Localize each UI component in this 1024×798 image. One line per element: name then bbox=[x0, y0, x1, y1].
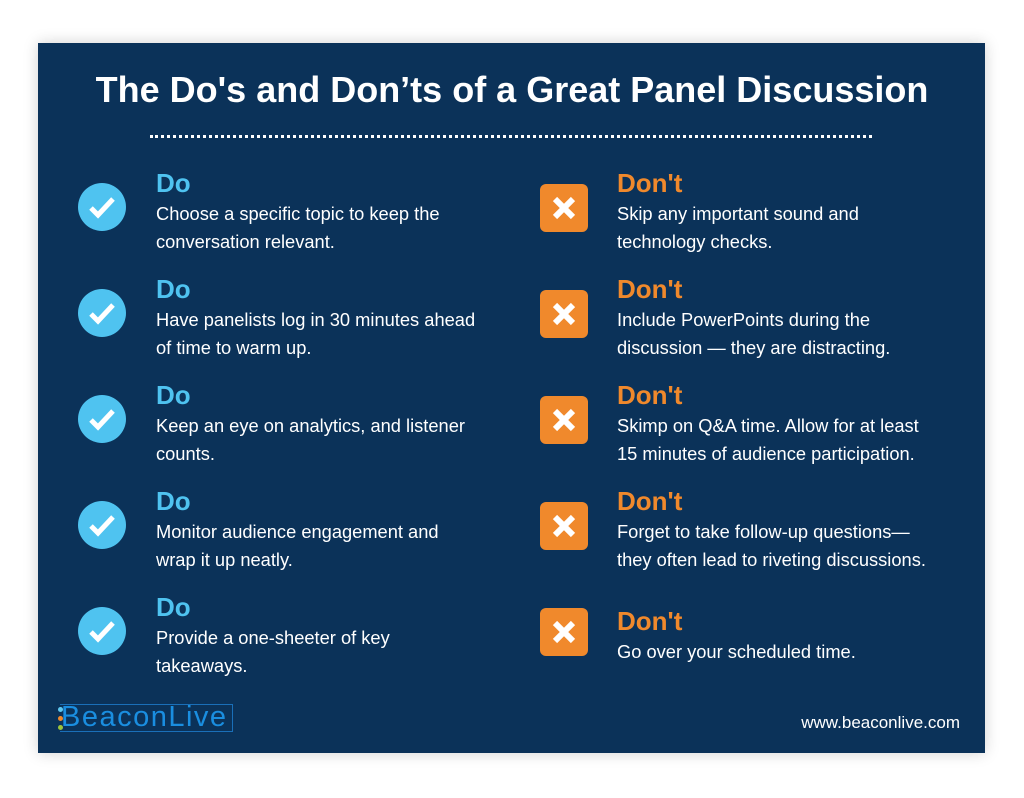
item: dont 2: Don't bbox=[617, 274, 682, 304]
item: do 2 bbox=[156, 274, 475, 358]
icon: x 4 bbox=[540, 502, 588, 550]
icon: check 4 bbox=[78, 501, 126, 549]
title: The Do's and Don’ts of a Great Panel Discussion bbox=[96, 69, 928, 110]
item: do 5: Do bbox=[156, 592, 191, 622]
item: do 4: wrap it up neatly. bbox=[156, 549, 293, 570]
item: do 4 bbox=[156, 486, 439, 570]
item: dont 1 bbox=[617, 168, 859, 252]
item: do 2: Have panelists log in 30 minutes ahead bbox=[156, 309, 475, 330]
item: dont 4: Don't bbox=[617, 486, 682, 516]
item: do 4: Do bbox=[156, 486, 191, 516]
item: do 1: conversation relevant. bbox=[156, 231, 335, 252]
item: dont 1: Don't bbox=[617, 168, 682, 198]
icon: x 5 bbox=[540, 608, 588, 656]
item: dont 3: 15 minutes of audience participation. bbox=[617, 443, 915, 464]
item: dont 1: technology checks. bbox=[617, 231, 772, 252]
item: dont 4: Forget to take follow-up questions— bbox=[617, 521, 910, 542]
icon: check 3 bbox=[78, 395, 126, 443]
item: do 5 bbox=[156, 592, 390, 676]
column: don't items bbox=[540, 168, 926, 662]
item: do 1: Choose a specific topic to keep the bbox=[156, 203, 440, 224]
item: dont 5: Don't bbox=[617, 606, 682, 636]
item: dont 2: Include PowerPoints during the bbox=[617, 309, 870, 330]
item: dont 2: discussion — they are distracting. bbox=[617, 337, 890, 358]
icon: check 1 bbox=[78, 183, 126, 231]
item: do 5: Provide a one-sheeter of key bbox=[156, 627, 390, 648]
item: dont 4: they often lead to riveting discussions. bbox=[617, 549, 926, 570]
item: dont 3: Don't bbox=[617, 380, 682, 410]
item: do 1 bbox=[156, 168, 440, 252]
item: dont 5 bbox=[617, 606, 856, 662]
item: do 4: Monitor audience engagement and bbox=[156, 521, 439, 542]
item: dont 3 bbox=[617, 380, 919, 464]
item: do 2: Do bbox=[156, 274, 191, 304]
item: dont 1: Skip any important sound and bbox=[617, 203, 859, 224]
item: do 2: of time to warm up. bbox=[156, 337, 311, 358]
item: dont 5: Go over your scheduled time. bbox=[617, 641, 856, 662]
item: do 1: Do bbox=[156, 168, 191, 198]
logo: BeaconLive: BeaconLive bbox=[61, 701, 228, 733]
icon: check 2 bbox=[78, 289, 126, 337]
item: dont 2 bbox=[617, 274, 890, 358]
item: do 5: takeaways. bbox=[156, 655, 247, 676]
item: dont 3: Skimp on Q&A time. Allow for at least bbox=[617, 415, 919, 436]
item: do 3: counts. bbox=[156, 443, 215, 464]
icon: x 1 bbox=[540, 184, 588, 232]
footer url: www.beaconlive.com bbox=[801, 713, 960, 732]
item: do 3 bbox=[156, 380, 465, 464]
item: do 3: Keep an eye on analytics, and listener bbox=[156, 415, 465, 436]
item: dont 4 bbox=[617, 486, 926, 570]
icon: x 2 bbox=[540, 290, 588, 338]
icon: x 3 bbox=[540, 396, 588, 444]
column: do items bbox=[78, 168, 475, 676]
icon: check 5 bbox=[78, 607, 126, 655]
item: do 3: Do bbox=[156, 380, 191, 410]
